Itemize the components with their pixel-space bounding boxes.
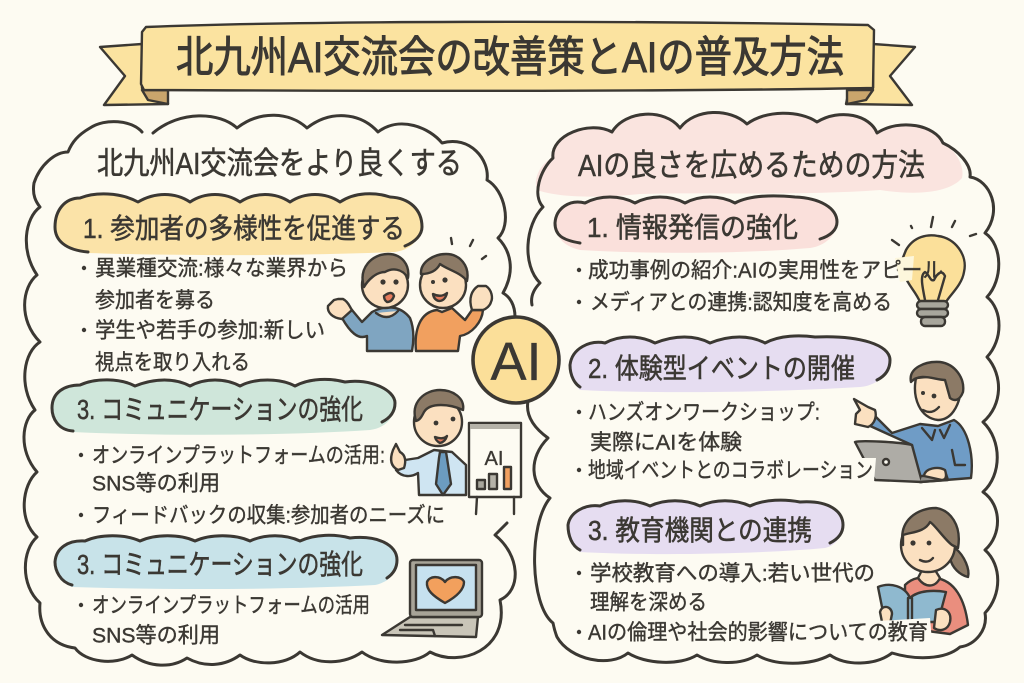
icon: two people waving bbox=[328, 238, 492, 351]
text block: left section 2 bbox=[79, 444, 445, 528]
icon: presenter with AI board: AI bbox=[485, 448, 503, 470]
icon: woman reading bbox=[878, 508, 968, 634]
ponytail bbox=[950, 548, 968, 577]
panel: right section 3 pill bbox=[568, 500, 843, 554]
icon: AI badge: AI bbox=[490, 332, 542, 392]
ribbon tail left bbox=[100, 44, 168, 105]
text block: right section 2: ハンズオンワークショップ: bbox=[588, 401, 820, 425]
laptop bbox=[855, 441, 922, 482]
text block: right section 2: 実際にAIを体験 bbox=[590, 431, 742, 455]
text block: left section 1: 視点を取り入れる bbox=[95, 351, 250, 375]
icon: light bulb bbox=[892, 217, 976, 326]
text block: right section 2 bbox=[577, 401, 876, 483]
panel: left section 2 pill bbox=[52, 379, 395, 435]
text block: left section 2: フィードバックの収集:参加者のニーズに bbox=[92, 504, 445, 528]
text block: left section 1 bbox=[82, 257, 348, 375]
title banner bbox=[100, 22, 915, 105]
left person bbox=[342, 307, 413, 351]
text block: left section 1: 学生や若手の参加:新しい bbox=[95, 319, 325, 343]
panel: right section 1 pill bbox=[555, 196, 837, 253]
text block: right section 3 bbox=[577, 562, 932, 645]
pill heading: 3. コミュニケーションの強化 bbox=[77, 549, 363, 580]
text block: left section 3 bbox=[79, 594, 370, 648]
panel: left section 1 pill bbox=[55, 194, 422, 255]
shirt bbox=[905, 578, 968, 634]
motion lines bbox=[451, 238, 486, 259]
shirt bbox=[868, 416, 972, 482]
icon: man at laptop bbox=[854, 362, 972, 482]
pill heading: 3. 教育機関との連携 bbox=[588, 515, 812, 546]
text block: left section 3: オンラインプラットフォームの活用 bbox=[92, 594, 370, 618]
pill heading: 1. 参加者の多様性を促進する bbox=[83, 213, 405, 244]
head bbox=[414, 398, 462, 446]
ribbon tail right bbox=[846, 44, 915, 105]
text block: right section 3: AIの倫理や社会的影響についての教育 bbox=[588, 621, 928, 645]
heading: right panel: AIの良さを広めるための方法 bbox=[578, 148, 925, 183]
text block: left section 3: SNS等の利用 bbox=[92, 624, 220, 648]
icon: laptop with heart bbox=[382, 560, 482, 637]
text block: left section 2: SNS等の利用 bbox=[92, 472, 220, 496]
text block: left section 1: 異業種交流:様々な業界から bbox=[95, 257, 348, 281]
icon: AI badge bbox=[473, 317, 559, 403]
text block: right section 2: 地域イベントとのコラボレーション bbox=[588, 459, 873, 483]
shirt bbox=[396, 450, 466, 495]
hands bbox=[880, 607, 892, 624]
text block: left section 2: オンラインプラットフォームの活用: bbox=[92, 444, 385, 468]
panel: left cloud outline bbox=[24, 115, 515, 665]
heading: left panel: 北九州AI交流会をより良くする bbox=[97, 146, 462, 181]
panel: left section 3 pill bbox=[55, 535, 397, 589]
head bbox=[901, 518, 955, 572]
panel: right cloud outline bbox=[528, 112, 999, 663]
pill heading: 3. コミュニケーションの強化 bbox=[77, 394, 363, 425]
text block: right section 3: 理解を深める bbox=[590, 591, 707, 615]
panel: right header tint bbox=[536, 112, 963, 197]
board bbox=[469, 423, 521, 497]
text block: right section 1 bbox=[577, 256, 943, 315]
book bbox=[878, 585, 946, 622]
text block: right section 1: メディアとの連携:認知度を高める bbox=[590, 291, 892, 315]
title text: 北九州AI交流会の改善策とAIの普及方法 bbox=[176, 34, 844, 82]
text block: left section 1: 参加者を募る bbox=[95, 289, 215, 313]
tie bbox=[436, 452, 451, 495]
text block: right section 1: 成功事例の紹介:AIの実用性をアピール bbox=[588, 259, 943, 283]
right person bbox=[416, 308, 483, 351]
ribbon body bbox=[141, 22, 874, 91]
panel: right section 2 pill bbox=[570, 336, 890, 392]
icon: presenter with AI board bbox=[391, 390, 521, 514]
head bbox=[915, 375, 960, 420]
hand bbox=[854, 399, 876, 427]
pill heading: 2. 体験型イベントの開催 bbox=[588, 353, 855, 384]
pill heading: 1. 情報発信の強化 bbox=[587, 212, 798, 243]
text block: right section 3: 学校教育への導入:若い世代の bbox=[590, 562, 875, 586]
